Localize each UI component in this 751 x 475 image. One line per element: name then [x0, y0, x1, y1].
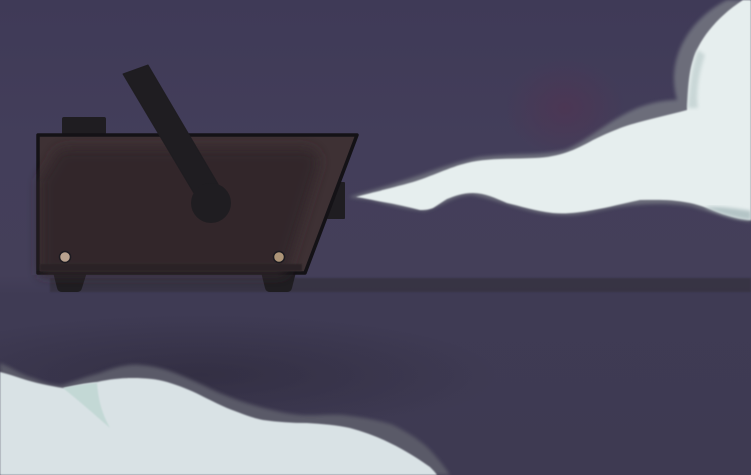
body lower edge: [40, 264, 302, 271]
dark shading on floor: [0, 315, 500, 435]
foot right: [261, 272, 296, 292]
reddish glow on wall: [505, 58, 625, 158]
foot left: [53, 272, 87, 292]
screw right: [274, 252, 284, 262]
body inner shade: [40, 148, 319, 275]
smoke cloud bottom left: [0, 363, 450, 475]
screw left: [60, 252, 70, 262]
top button: [62, 117, 106, 135]
nozzle: [327, 182, 345, 219]
lever: [123, 65, 218, 195]
smoke plume upper right: [349, 0, 751, 222]
floor line: [50, 278, 751, 292]
machine body: [38, 135, 357, 273]
lever pivot: [191, 183, 231, 223]
fog machine: [38, 65, 357, 292]
